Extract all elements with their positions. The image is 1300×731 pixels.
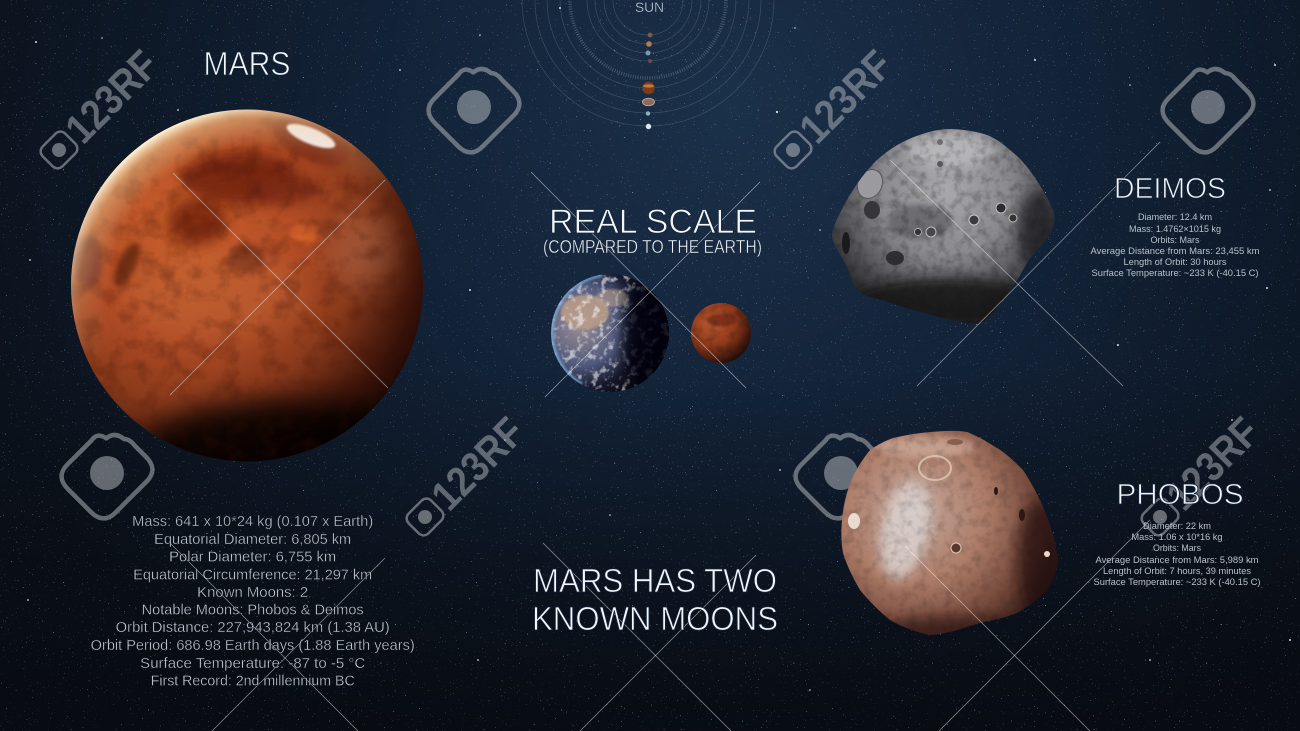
Mars facts list: Polar Diameter: 6,755 km [169, 550, 336, 566]
Mars facts list: Notable Moons: Phobos & Deimos [142, 602, 364, 618]
watermark: 123RF centre left: 123RF [422, 408, 533, 519]
polar ice cap [285, 122, 337, 150]
planets in column [642, 33, 655, 129]
watermark: 123RF top left: 123RF [56, 41, 167, 152]
heading: Mars has two known moons: MARS HAS TWO [533, 562, 777, 599]
watermark: 123RF centre left [397, 408, 533, 545]
diagonal watermark crosses [170, 142, 1160, 731]
heading: real scale: REAL SCALE [549, 203, 757, 241]
Deimos heading and facts: Diameter: 12.4 km [1138, 212, 1212, 223]
watermark: 123RF top left [31, 41, 167, 178]
watermark: large egg logo bottom left [55, 421, 159, 525]
planet: Earth [551, 274, 669, 392]
Phobos heading and facts: Mass: 1.06 x 10*16 kg [1132, 532, 1222, 543]
Phobos heading and facts: Length of Orbit: 7 hours, 39 minutes [1103, 566, 1251, 577]
Mars facts list: Mass: 641 x 10*24 kg (0.107 x Earth) [132, 514, 373, 530]
Phobos heading and facts: PHOBOS [1116, 479, 1244, 511]
Mars facts list: Equatorial Diameter: 6,805 km [154, 532, 351, 548]
watermark: large egg logo bottom centre right [789, 421, 893, 525]
Phobos heading and facts [1094, 479, 1260, 588]
heading: Mars has two known moons [532, 562, 778, 637]
Mars facts list: Orbit Period: 686.98 Earth days (1.88 Earth years) [91, 638, 415, 654]
Phobos heading and facts: Surface Temperature: ~233 K (-40.15 C) [1094, 577, 1260, 588]
craters [842, 139, 1017, 265]
heading: Mars has two known moons: KNOWN MOONS [532, 600, 778, 637]
planet: Mars [71, 110, 423, 462]
Phobos heading and facts: Average Distance from Mars: 5,989 km [1096, 555, 1259, 566]
Mars facts list: Equatorial Circumference: 21,297 km [133, 568, 372, 584]
Phobos heading and facts: Diameter: 22 km [1143, 521, 1211, 532]
solar system orbit diagram [522, 0, 774, 129]
title: Mars: MARS [204, 45, 290, 82]
Phobos heading and facts: Orbits: Mars [1153, 543, 1201, 554]
moon: Deimos [830, 128, 1058, 326]
Mars facts list [91, 514, 415, 690]
Mars facts list: Known Moons: 2 [197, 585, 308, 601]
Deimos heading and facts: DEIMOS [1114, 173, 1226, 205]
planet: Mars at real scale [691, 303, 751, 363]
Deimos heading and facts: Length of Orbit: 30 hours [1124, 257, 1227, 268]
Deimos heading and facts: Mass: 1.4762×1015 kg [1129, 224, 1221, 235]
watermark: 123RF bottom right: 123RF [1157, 408, 1268, 519]
watermark: large egg logo top centre [422, 55, 526, 159]
watermarks: 123RF logos [31, 41, 1268, 545]
Deimos heading and facts: Average Distance from Mars: 23,455 km [1090, 246, 1260, 257]
heading: real scale: (COMPARED TO THE EARTH) [543, 237, 762, 257]
Deimos heading and facts: Surface Temperature: ~233 K (-40.15 C) [1092, 268, 1258, 279]
Mars facts list: First Record: 2nd millennium BC [151, 674, 355, 690]
craters [848, 439, 1050, 557]
watermark: large egg logo top right [1156, 55, 1260, 159]
moon: Phobos [840, 430, 1062, 644]
Deimos heading and facts [1090, 173, 1260, 279]
watermark: 123RF bottom right [1132, 408, 1268, 545]
Mars facts list: Surface Temperature: -87 to -5 °C [140, 656, 365, 672]
watermark: 123RF top centre right [765, 41, 901, 178]
heading: real scale [543, 203, 762, 257]
Deimos heading and facts: Orbits: Mars [1150, 235, 1200, 246]
Mars facts list: Orbit Distance: 227,943,824 km (1.38 AU) [116, 620, 390, 636]
watermark: 123RF top centre right: 123RF [790, 41, 901, 152]
